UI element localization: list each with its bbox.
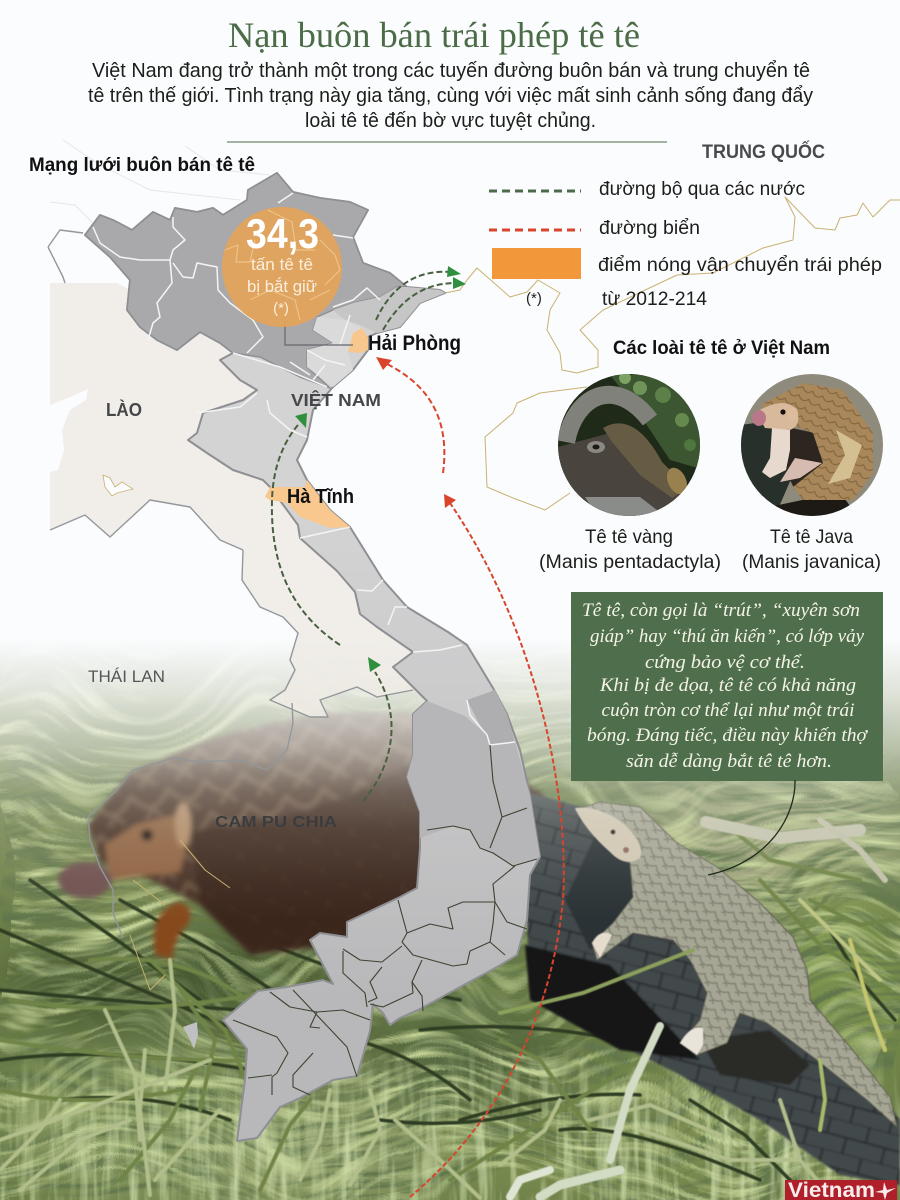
pangolin: tortoise-shell dark mass [520, 790, 900, 1185]
arrow: land route to China 2 [383, 277, 466, 330]
title: Nạn buôn bán trái phép tê tê [228, 15, 640, 55]
arrow: land route from Cambodia [363, 657, 392, 801]
island: Phu Quoc [183, 1022, 198, 1049]
callout: 34,3 tonnes seized: tấn tê tê [251, 256, 313, 274]
map labels: CAM PU CHIA [215, 814, 338, 831]
region: Quang Ninh (mid grey) [333, 287, 445, 333]
heading: trade network: Mạng lưới buôn bán tê tê [29, 155, 255, 176]
intro text: loài tê tê đến bờ vực tuyệt chủng. [305, 110, 596, 132]
species labels: Tê tê Java [770, 526, 853, 548]
callout box: pangolin description: cứng bảo vệ cơ thể. [645, 652, 805, 673]
species labels [539, 526, 881, 573]
map labels: VIỆT NAM [291, 389, 381, 410]
callout: 34,3 tonnes seized: bị bắt giữ [247, 277, 317, 296]
grass: mid blades [0, 834, 892, 1192]
map: Vietnam [85, 173, 540, 1141]
province lines: north and centre (white) [93, 193, 515, 745]
map labels: TRUNG QUỐC [702, 141, 825, 163]
legend: land route: đường bộ qua các nước [599, 178, 805, 200]
borders: Thailand and Cambodia [48, 230, 413, 938]
map labels: Hải Phòng [368, 332, 461, 355]
region: northern provinces (darker) [85, 173, 407, 388]
heading: species: Các loài tê tê ở Việt Nam [613, 338, 830, 359]
hotspot: Ha Tinh [265, 480, 350, 528]
country: Laos (beige) [50, 283, 427, 717]
border: faint China lines [50, 140, 270, 222]
map labels [88, 141, 825, 831]
callout box: pangolin description: Khi bị đe dọa, tê tê có khả năng [599, 675, 856, 696]
intro text [88, 60, 813, 132]
grass: dark blades [0, 880, 895, 1190]
region: central highlands [407, 701, 540, 866]
grass texture: light streaks [0, 670, 900, 1200]
callout box: pangolin description [571, 592, 883, 781]
callout: 34,3 tonnes seized [222, 207, 353, 345]
species labels: Tê tê vàng [585, 526, 673, 548]
legend: hotspot: điểm nóng vận chuyển trái phép [598, 254, 882, 276]
pangolin: grey foreground body [575, 802, 897, 1127]
arrow: long sea route [410, 494, 564, 1197]
arrow: sea route to Hai Phong [376, 357, 444, 473]
intro text: tê trên thế giới. Tình trạng này gia tăng, cùng với việc mất sinh cảnh sống đang đẩy [88, 85, 813, 107]
grass: light blades [0, 820, 885, 1198]
map labels: THÁI LAN [88, 667, 165, 686]
legend: hotspot: từ 2012-214 [602, 288, 707, 310]
callout: 34,3 tonnes seized: (*) [273, 300, 289, 317]
map labels: Hà Tĩnh [287, 486, 354, 508]
legend: hotspot: (*) [526, 290, 542, 307]
coast: China and Hainan tan outline [130, 197, 900, 990]
legend: sea route: đường biển [599, 217, 700, 239]
arrow: land route to China 1 [376, 266, 461, 320]
photo: Manis javanica [741, 374, 883, 516]
legend [489, 178, 882, 310]
lake: Nam Ngum reservoir [103, 475, 133, 496]
arrow: land route through Ha Tinh [272, 413, 340, 645]
grass texture: upright stalks [0, 1047, 900, 1200]
callout box: pangolin description: săn dễ dàng bắt tê tê hơn. [626, 751, 832, 772]
map: neighbouring countries [48, 140, 900, 1049]
intro text: Việt Nam đang trở thành một trong các tuyến đường buôn bán và trung chuyển tê [92, 60, 810, 82]
leader line: callout to pangolin [708, 780, 795, 875]
species labels: (Manis javanica) [742, 551, 881, 573]
Vietnam outline [85, 173, 540, 1141]
fog fade over photo [0, 600, 900, 920]
callout box: pangolin description: bóng. Đáng tiếc, điều này khiến thợ [587, 725, 869, 746]
callout box: pangolin description: giáp” hay “thú ăn kiến”, có lớp vảy [590, 626, 865, 647]
legend: hotspot [492, 248, 882, 310]
callout box: pangolin description: Tê tê, còn gọi là “trút”, “xuyên sơn [582, 600, 860, 621]
grass texture: dark streaks [0, 778, 900, 1200]
region: Red River delta (light) [307, 317, 362, 387]
callout box: pangolin description: cuộn tròn cơ thể lại như một trái [602, 700, 854, 721]
lake: white patch west Laos [50, 389, 88, 472]
background photo: pangolins in grass [0, 600, 900, 1200]
province lines: south (dark) [233, 745, 537, 1095]
callout: 34,3 tonnes seized: 34,3 [246, 210, 319, 257]
photo: Manis pentadactyla [558, 374, 700, 516]
hotspot: Hai Phong [348, 328, 368, 353]
map labels: LÀO [106, 399, 142, 420]
pangolin: large blurred foreground at left [58, 712, 570, 960]
species labels: (Manis pentadactyla) [539, 551, 721, 573]
